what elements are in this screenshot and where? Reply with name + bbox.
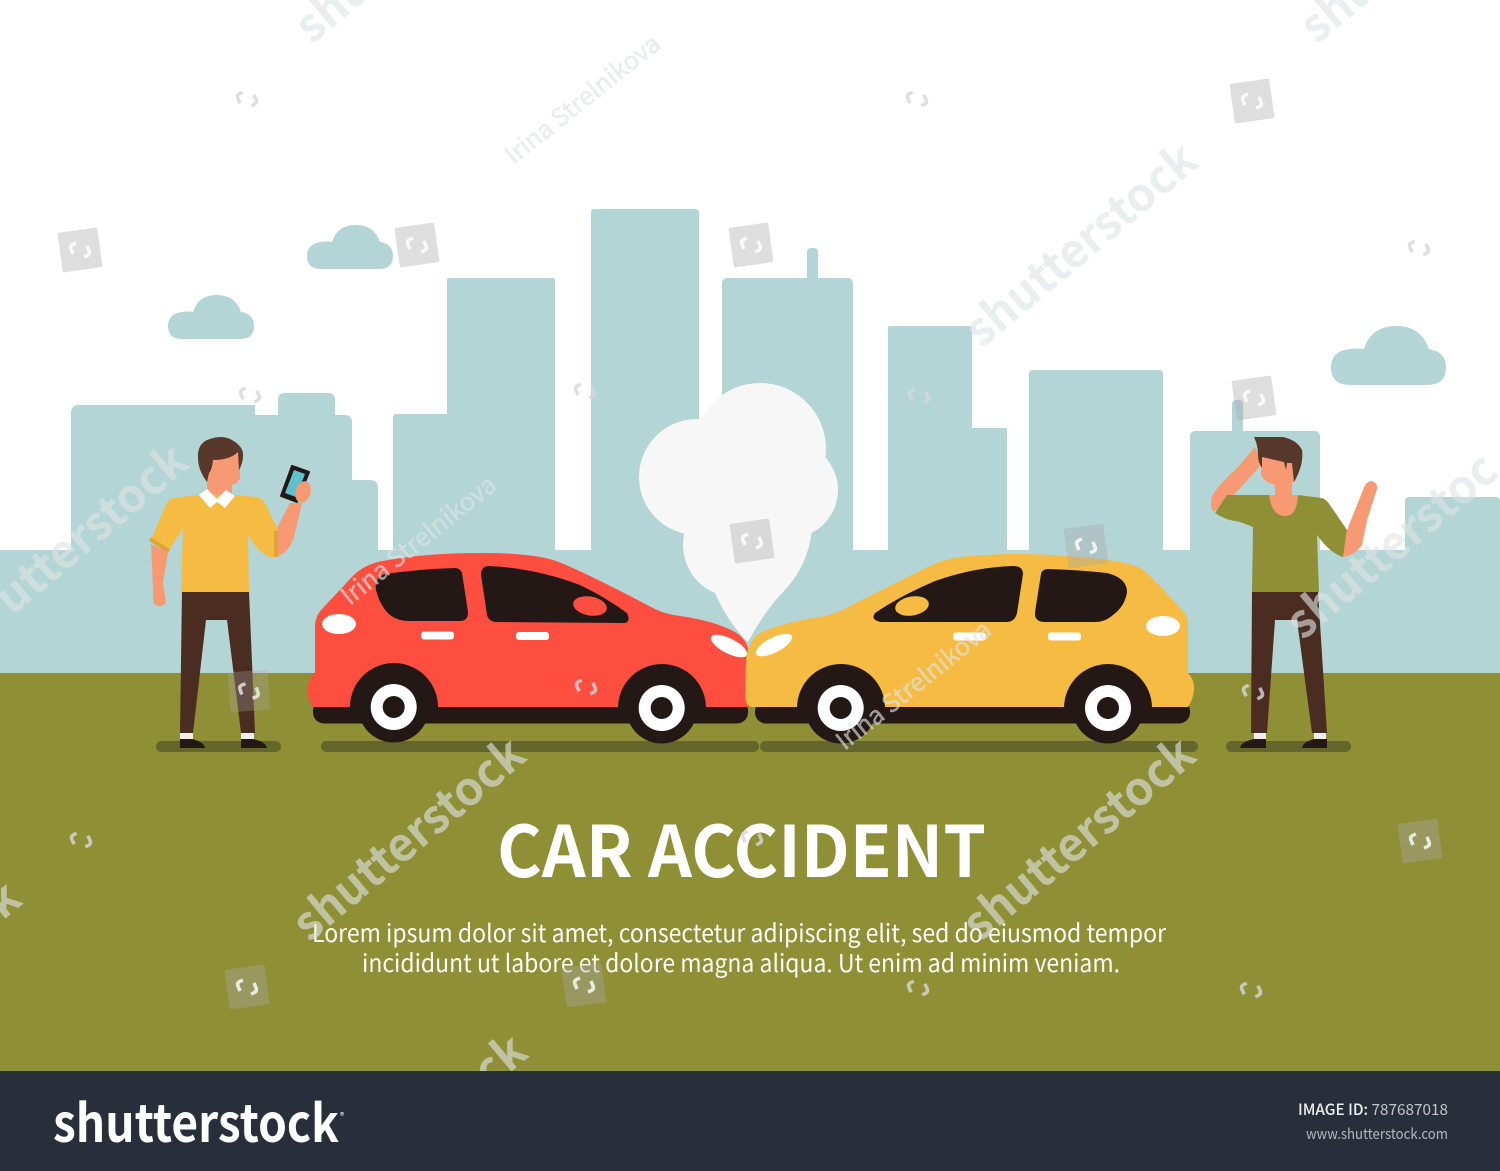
image id xyxy=(1298,1098,1448,1144)
ground shadows xyxy=(156,741,1351,752)
watermark text: Irina Strelnikova xyxy=(332,466,503,612)
description xyxy=(312,915,1166,980)
watermark text: shutterstock xyxy=(948,125,1210,360)
man scratching head xyxy=(1211,437,1377,748)
shoes xyxy=(180,739,267,748)
hair xyxy=(1254,437,1302,482)
image id: www.shutterstock.com xyxy=(1306,1123,1448,1144)
yellow car xyxy=(745,554,1194,744)
collar xyxy=(199,489,235,508)
footer logo: shutterstock xyxy=(53,1082,340,1157)
cloud left low xyxy=(168,295,254,339)
watermark text: shutterstock xyxy=(276,719,538,954)
footer bar xyxy=(0,1071,1500,1171)
ground xyxy=(0,673,1500,1071)
footer logo: ® xyxy=(340,1109,344,1122)
watermark text: ck xyxy=(457,1016,539,1100)
cloud left high xyxy=(307,225,393,269)
watermark text: shutterstock xyxy=(946,719,1208,954)
cloud right xyxy=(1331,326,1446,385)
shoes xyxy=(1240,739,1327,748)
description: incididunt ut labore et dolore magna aliqua. Ut enim ad minim veniam. xyxy=(362,945,1120,980)
smoke cloud xyxy=(639,383,838,642)
sweater xyxy=(150,495,278,592)
watermark text: Irina Strelnikova xyxy=(496,25,667,171)
arms xyxy=(151,503,302,606)
phone xyxy=(281,466,309,502)
shirt xyxy=(1215,495,1347,592)
neck and face xyxy=(1261,457,1298,516)
title: CAR ACCIDENT xyxy=(497,796,986,898)
image id: IMAGE ID: 787687018 xyxy=(1298,1098,1448,1120)
man with phone xyxy=(150,437,313,748)
hair xyxy=(198,437,243,482)
watermark text: Irina Strelnikova xyxy=(827,611,998,757)
city skyline xyxy=(0,209,1500,674)
description: Lorem ipsum dolor sit amet, consectetur adipiscing elit, sed do eiusmod tempor xyxy=(312,915,1166,950)
neck and face xyxy=(207,453,240,503)
arms xyxy=(1211,447,1377,557)
watermark badges xyxy=(57,78,1443,1010)
trousers xyxy=(1251,592,1327,733)
trousers xyxy=(180,592,255,733)
hand xyxy=(293,479,313,505)
red car xyxy=(307,553,750,744)
